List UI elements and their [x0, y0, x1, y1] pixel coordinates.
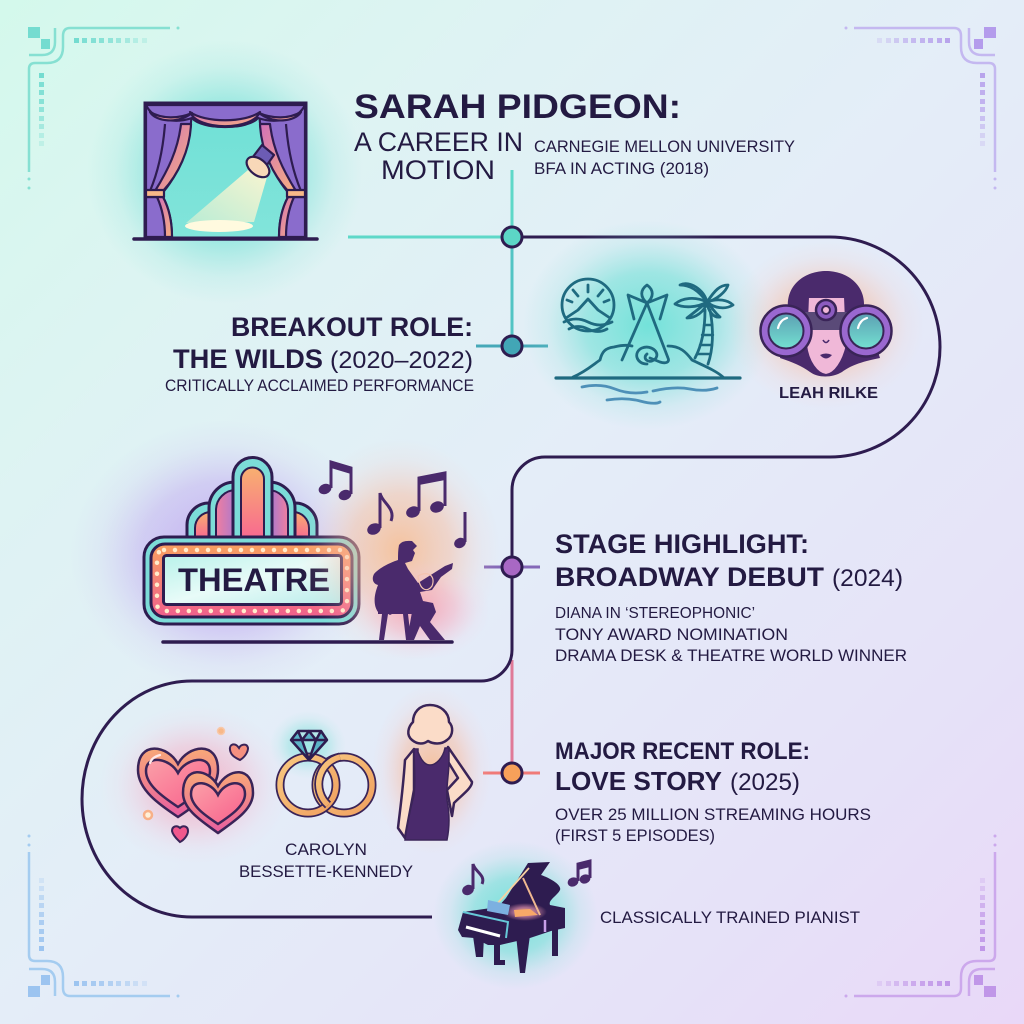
text: major recent role: (2025) — [730, 769, 800, 796]
icon: grand piano with notes — [433, 841, 597, 989]
corner ornament: top left — [28, 26, 180, 190]
icon: hearts — [100, 705, 290, 865]
icon: woman in black dress — [372, 685, 492, 855]
timeline node: major recent role — [502, 763, 522, 783]
text: major recent role: OVER 25 MILLION STREAMING HOURS — [555, 806, 871, 824]
text: major recent role: LOVE STORY — [555, 766, 722, 796]
timeline node: breakout role — [502, 336, 522, 356]
label: Leah Rilke: LEAH RILKE — [779, 385, 878, 402]
label: Carolyn Bessette-Kennedy: CAROLYN — [285, 841, 367, 859]
corner ornament: top right — [844, 26, 996, 190]
icon: wedding rings with diamond — [270, 711, 372, 813]
title: SARAH PIDGEON: — [354, 88, 681, 126]
label: Carolyn Bessette-Kennedy — [239, 841, 413, 881]
title: MOTION — [381, 155, 495, 185]
education text: CARNEGIE MELLON UNIVERSITY — [534, 137, 795, 156]
timeline: winding career path — [82, 170, 940, 917]
title — [354, 88, 681, 185]
text: stage highlight — [555, 529, 907, 665]
icon: theatre stage with curtains and spotlight — [87, 40, 363, 304]
icon: woman with binoculars — [728, 241, 924, 409]
timeline node: stage highlight — [502, 557, 522, 577]
corner ornament: bottom left — [28, 834, 180, 998]
icon: guitarist with musical notes — [163, 438, 500, 662]
text: major recent role: (FIRST 5 EPISODES) — [555, 827, 715, 845]
text: major recent role — [555, 738, 871, 845]
text: breakout role: BREAKOUT ROLE: — [231, 312, 473, 342]
marquee sign text: THEATRE — [178, 562, 330, 598]
text: stage highlight: BROADWAY DEBUT — [555, 562, 824, 592]
title: A CAREER IN — [354, 127, 523, 157]
text: stage highlight: STAGE HIGHLIGHT: — [555, 529, 809, 559]
icon: tropical island — [523, 220, 773, 430]
text: stage highlight: DIANA IN ‘STEREOPHONIC’ — [555, 605, 755, 622]
education text — [534, 137, 795, 178]
text: classically trained pianist: CLASSICALLY TRAINED PIANIST — [600, 909, 860, 927]
corner ornament: bottom right — [844, 834, 996, 998]
text: breakout role: THE WILDS — [173, 344, 323, 374]
education text: BFA IN ACTING (2018) — [534, 159, 709, 178]
text: stage highlight: TONY AWARD NOMINATION — [555, 626, 788, 644]
text: breakout role — [165, 312, 474, 395]
icon: theatre marquee — [70, 420, 380, 690]
text: major recent role: MAJOR RECENT ROLE: — [555, 738, 810, 765]
text: stage highlight: DRAMA DESK & THEATRE WORLD WINNER — [555, 647, 907, 665]
text: breakout role: (2020–2022) — [330, 347, 473, 374]
text: breakout role: CRITICALLY ACCLAIMED PERFORMANCE — [165, 377, 474, 395]
label: Carolyn Bessette-Kennedy: BESSETTE-KENNEDY — [239, 863, 413, 881]
timeline node: start — [502, 227, 522, 247]
text: stage highlight: (2024) — [832, 565, 903, 592]
